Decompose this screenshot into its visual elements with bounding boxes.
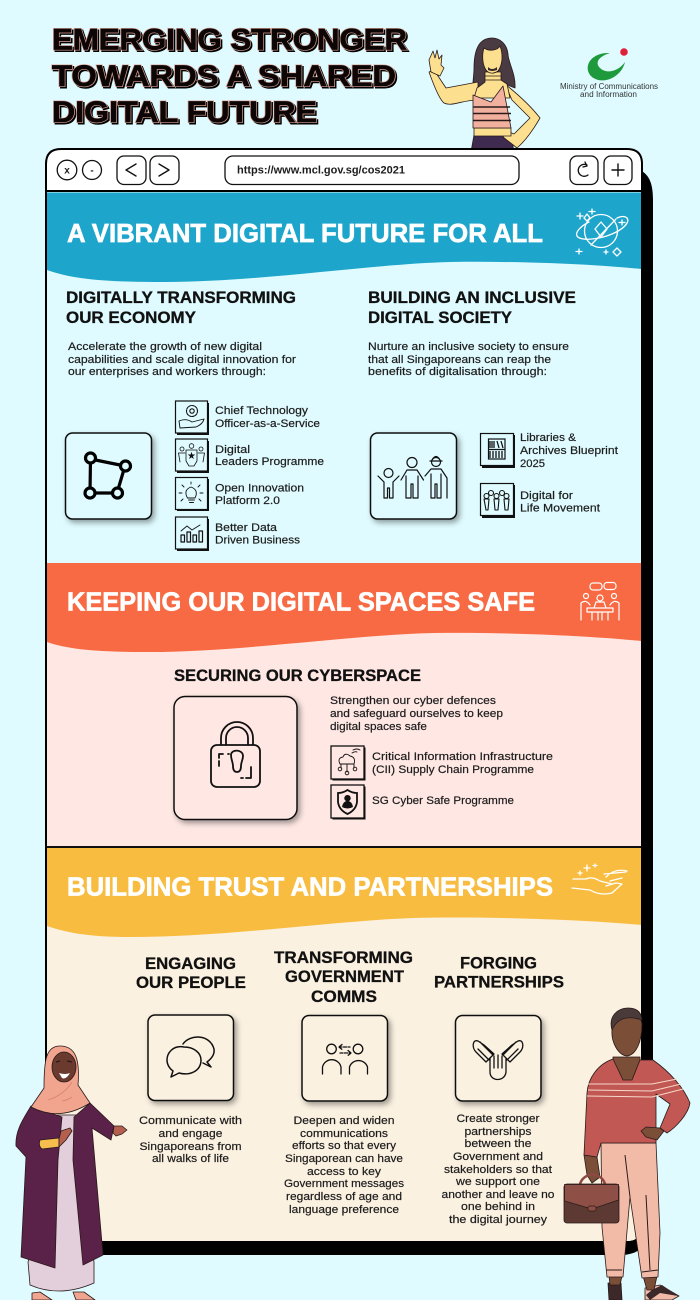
item: better data driven business: Driven Business xyxy=(215,534,300,546)
item: chief technology officer: Officer-as-a-Service xyxy=(215,418,320,430)
heading: building an inclusive: DIGITAL SOCIETY xyxy=(368,309,512,327)
text: economy description: Accelerate the growth of new digital xyxy=(68,341,262,353)
panel: a vibrant digital future xyxy=(46,192,642,1242)
heading: securing our cyberspace: SECURING OUR CYBERSPACE xyxy=(174,667,421,685)
item: libraries and archives blueprint: 2025 xyxy=(520,458,545,470)
heading: engaging our people: OUR PEOPLE xyxy=(136,974,246,992)
column: transforming government comms xyxy=(274,949,413,1216)
text: comms description: language preference xyxy=(289,1204,399,1216)
text: engaging description: Communicate with xyxy=(139,1115,242,1127)
text: partnerships description: partnerships xyxy=(464,1126,532,1138)
item: libraries and archives blueprint: Libraries & xyxy=(520,432,577,444)
character: waving woman xyxy=(429,38,540,152)
text: cyber description: digital spaces safe xyxy=(330,721,427,733)
panel: keeping our digital spaces safe xyxy=(47,563,641,846)
title xyxy=(52,24,409,130)
icon: meeting table xyxy=(581,582,619,620)
text: partnerships description: stakeholders so that xyxy=(444,1164,553,1176)
logo: Ministry of Communications and Information: and Information xyxy=(580,90,637,99)
text: cyber description xyxy=(330,695,503,733)
item: chief technology officer xyxy=(176,401,320,435)
text: partnerships description: between the xyxy=(464,1138,532,1150)
browser toolbar: - xyxy=(90,166,94,176)
text: society description: Nurture an inclusive society to ensure xyxy=(368,341,569,353)
browser toolbar xyxy=(57,156,632,184)
item: digital leaders programme xyxy=(176,439,324,473)
browser toolbar: https://www.mcl.gov.sg/cos2021 xyxy=(237,164,405,176)
browser window drop shadow xyxy=(100,170,653,1255)
icon: padlock xyxy=(174,696,297,820)
item: digital for life movement: Life Movement xyxy=(520,502,601,514)
text: comms description: Deepen and widen xyxy=(294,1115,394,1127)
text: comms description: access to key xyxy=(307,1166,381,1178)
panel: building trust and partnerships xyxy=(47,848,641,1241)
text: comms description xyxy=(284,1115,404,1216)
column: digitally transforming our economy xyxy=(66,289,324,551)
item: digital for life movement: Digital for xyxy=(520,490,573,502)
text: society description: benefits of digitalisation through: xyxy=(368,366,547,378)
title: TOWARDS A SHARED xyxy=(54,62,398,94)
title: EMERGING STRONGER xyxy=(52,24,407,56)
item: chief technology officer: Chief Technology xyxy=(215,405,308,417)
title: DIGITAL FUTURE xyxy=(52,96,317,129)
heading: forging partnerships: FORGING xyxy=(460,954,537,972)
text: economy description: our enterprises and workers through: xyxy=(68,366,266,378)
text: comms description: Government messages xyxy=(284,1178,404,1190)
icon: joined hands xyxy=(456,1016,541,1101)
item: libraries and archives blueprint: Archives Blueprint xyxy=(520,445,619,457)
text: economy description xyxy=(68,341,296,378)
logo: Ministry of Communications and Information: Ministry of Communications xyxy=(560,82,658,91)
text: partnerships description: the digital journey xyxy=(449,1214,547,1226)
text: cyber description: Strengthen our cyber defences xyxy=(330,695,496,707)
text: comms description: communications xyxy=(300,1128,388,1140)
banner: yellow heading xyxy=(47,848,641,937)
text: partnerships description: Government and xyxy=(453,1151,543,1163)
text: society description xyxy=(368,341,569,378)
text: partnerships description: Create stronger xyxy=(456,1113,540,1125)
text: engaging description xyxy=(139,1115,242,1165)
item: sg cyber safe programme: SG Cyber Safe Programme xyxy=(372,795,514,807)
item: critical information infrastructure xyxy=(331,746,553,780)
column: building an inclusive digital society xyxy=(368,289,619,519)
title: TOWARDS A SHARED xyxy=(52,60,396,93)
item: better data driven business: Better Data xyxy=(215,522,278,534)
item: open innovation platform: Open Innovation xyxy=(215,482,304,494)
title: DIGITAL FUTURE xyxy=(52,96,317,129)
text: engaging description: all walks of life xyxy=(152,1153,229,1165)
text: partnerships description: another and leave no xyxy=(442,1189,554,1201)
heading: engaging our people xyxy=(136,955,246,992)
text: partnerships description xyxy=(442,1113,554,1226)
heading: transforming government comms: GOVERNMENT xyxy=(285,968,404,986)
item: better data driven business xyxy=(176,517,300,551)
title: DIGITAL FUTURE xyxy=(54,98,318,130)
text: society description: that all Singaporeans can reap the xyxy=(368,354,551,366)
title: TOWARDS A SHARED xyxy=(52,60,396,93)
text: engaging description: Singaporeans from xyxy=(140,1141,242,1153)
heading: transforming government comms xyxy=(274,949,413,1006)
text: partnerships description: we support one xyxy=(455,1176,540,1188)
text: cyber description: and safeguard ourselves to keep xyxy=(330,708,503,720)
item: libraries and archives blueprint xyxy=(480,432,619,470)
item: digital leaders programme: Leaders Programme xyxy=(215,456,324,468)
heading: forging partnerships: PARTNERSHIPS xyxy=(434,974,564,992)
browser toolbar: x xyxy=(64,166,70,176)
heading: transforming government comms: TRANSFORMING xyxy=(274,949,413,967)
item: open innovation platform: Platform 2.0 xyxy=(215,495,280,507)
heading: digitally transforming: DIGITALLY TRANSFORMING xyxy=(66,289,296,307)
text: economy description: capabilities and scale digital innovation for xyxy=(68,354,296,366)
item: open innovation platform xyxy=(176,478,304,511)
item: critical information infrastructure: (CII) Supply Chain Programme xyxy=(372,764,534,776)
heading: digitally transforming xyxy=(66,289,296,327)
icon: planet and stars xyxy=(576,209,628,256)
character: standing person with briefcase xyxy=(564,1008,690,1300)
heading: building an inclusive xyxy=(368,289,576,327)
text: partnerships description: one behind in xyxy=(461,1201,535,1213)
banner: blue heading xyxy=(47,192,641,282)
heading: engaging our people: ENGAGING xyxy=(145,955,236,973)
text: comms description: Singaporean can have xyxy=(285,1153,403,1165)
item: sg cyber safe programme xyxy=(331,785,514,820)
banner: blue heading: A VIBRANT DIGITAL FUTURE FOR ALL xyxy=(67,218,543,248)
banner: orange heading xyxy=(47,563,641,652)
banner: orange heading: KEEPING OUR DIGITAL SPACES SAFE xyxy=(67,586,535,616)
banner: yellow heading: BUILDING TRUST AND PARTNERSHIPS xyxy=(67,872,553,902)
item: digital leaders programme: Digital xyxy=(215,444,250,456)
heading: forging partnerships xyxy=(434,954,564,992)
character: woman in hijab xyxy=(16,1046,127,1300)
heading: digitally transforming: OUR ECONOMY xyxy=(66,309,196,327)
icon: speech bubbles xyxy=(148,1015,234,1100)
item: digital for life movement xyxy=(480,484,601,518)
icon: two people exchanging xyxy=(302,1016,388,1101)
text: comms description: efforts so that every xyxy=(292,1140,396,1152)
title: EMERGING STRONGER xyxy=(54,25,409,58)
column: forging partnerships xyxy=(434,954,564,1226)
title: EMERGING STRONGER xyxy=(52,24,407,56)
item: critical information infrastructure: Critical Information Infrastructure xyxy=(372,751,553,763)
icon: connected nodes xyxy=(66,433,152,519)
text: engaging description: and engage xyxy=(158,1128,222,1140)
icon: family of three generations xyxy=(370,433,456,519)
item: digital leaders programme: ★ xyxy=(187,451,196,462)
icon: giving hands xyxy=(572,864,627,894)
heading: transforming government comms: COMMS xyxy=(311,988,377,1006)
heading: building an inclusive: BUILDING AN INCLUSIVE xyxy=(368,289,576,307)
text: comms description: regardless of age and xyxy=(286,1191,402,1203)
column: engaging our people xyxy=(136,955,246,1165)
logo: Ministry of Communications and Information xyxy=(560,48,658,99)
